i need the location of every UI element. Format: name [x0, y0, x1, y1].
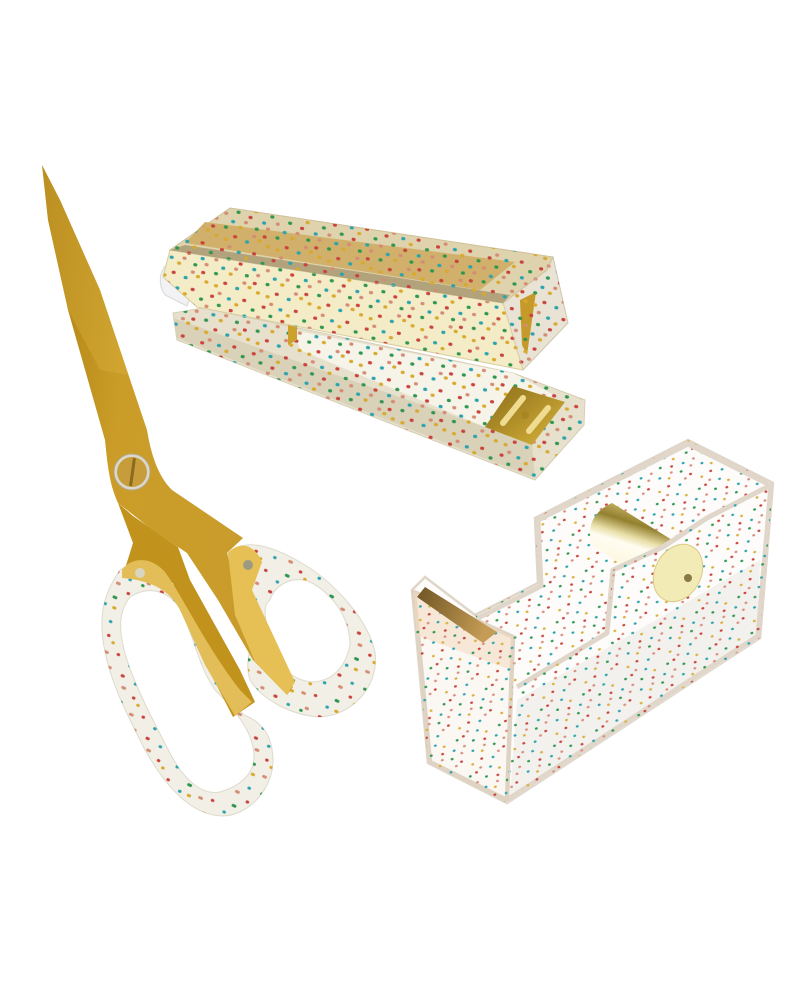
gold cutter bar	[417, 587, 497, 643]
scissors	[42, 165, 376, 816]
left arm inside acrylic	[122, 560, 252, 716]
pivot screw	[114, 454, 150, 490]
tape core cylinder	[590, 503, 677, 572]
tape hub disc	[644, 536, 712, 610]
left finger ring	[102, 564, 273, 816]
tape dispenser	[412, 440, 773, 803]
main blade and right arm	[42, 165, 293, 695]
stapler side face	[163, 250, 523, 370]
front panel	[412, 590, 515, 803]
stapler top face	[170, 208, 553, 303]
near side panel	[507, 485, 773, 803]
white spring end	[160, 262, 195, 306]
right arm inside acrylic	[228, 546, 295, 695]
right finger ring	[228, 545, 376, 717]
staple plate	[485, 386, 565, 445]
blade highlight	[42, 165, 128, 375]
stapler end face	[503, 257, 568, 370]
back rim	[478, 444, 768, 618]
left gold arm	[118, 503, 255, 717]
back panel	[412, 440, 773, 803]
stapler base	[173, 308, 585, 480]
stapler hinge	[288, 305, 297, 345]
stapler	[160, 208, 585, 480]
handle screws	[135, 560, 253, 578]
